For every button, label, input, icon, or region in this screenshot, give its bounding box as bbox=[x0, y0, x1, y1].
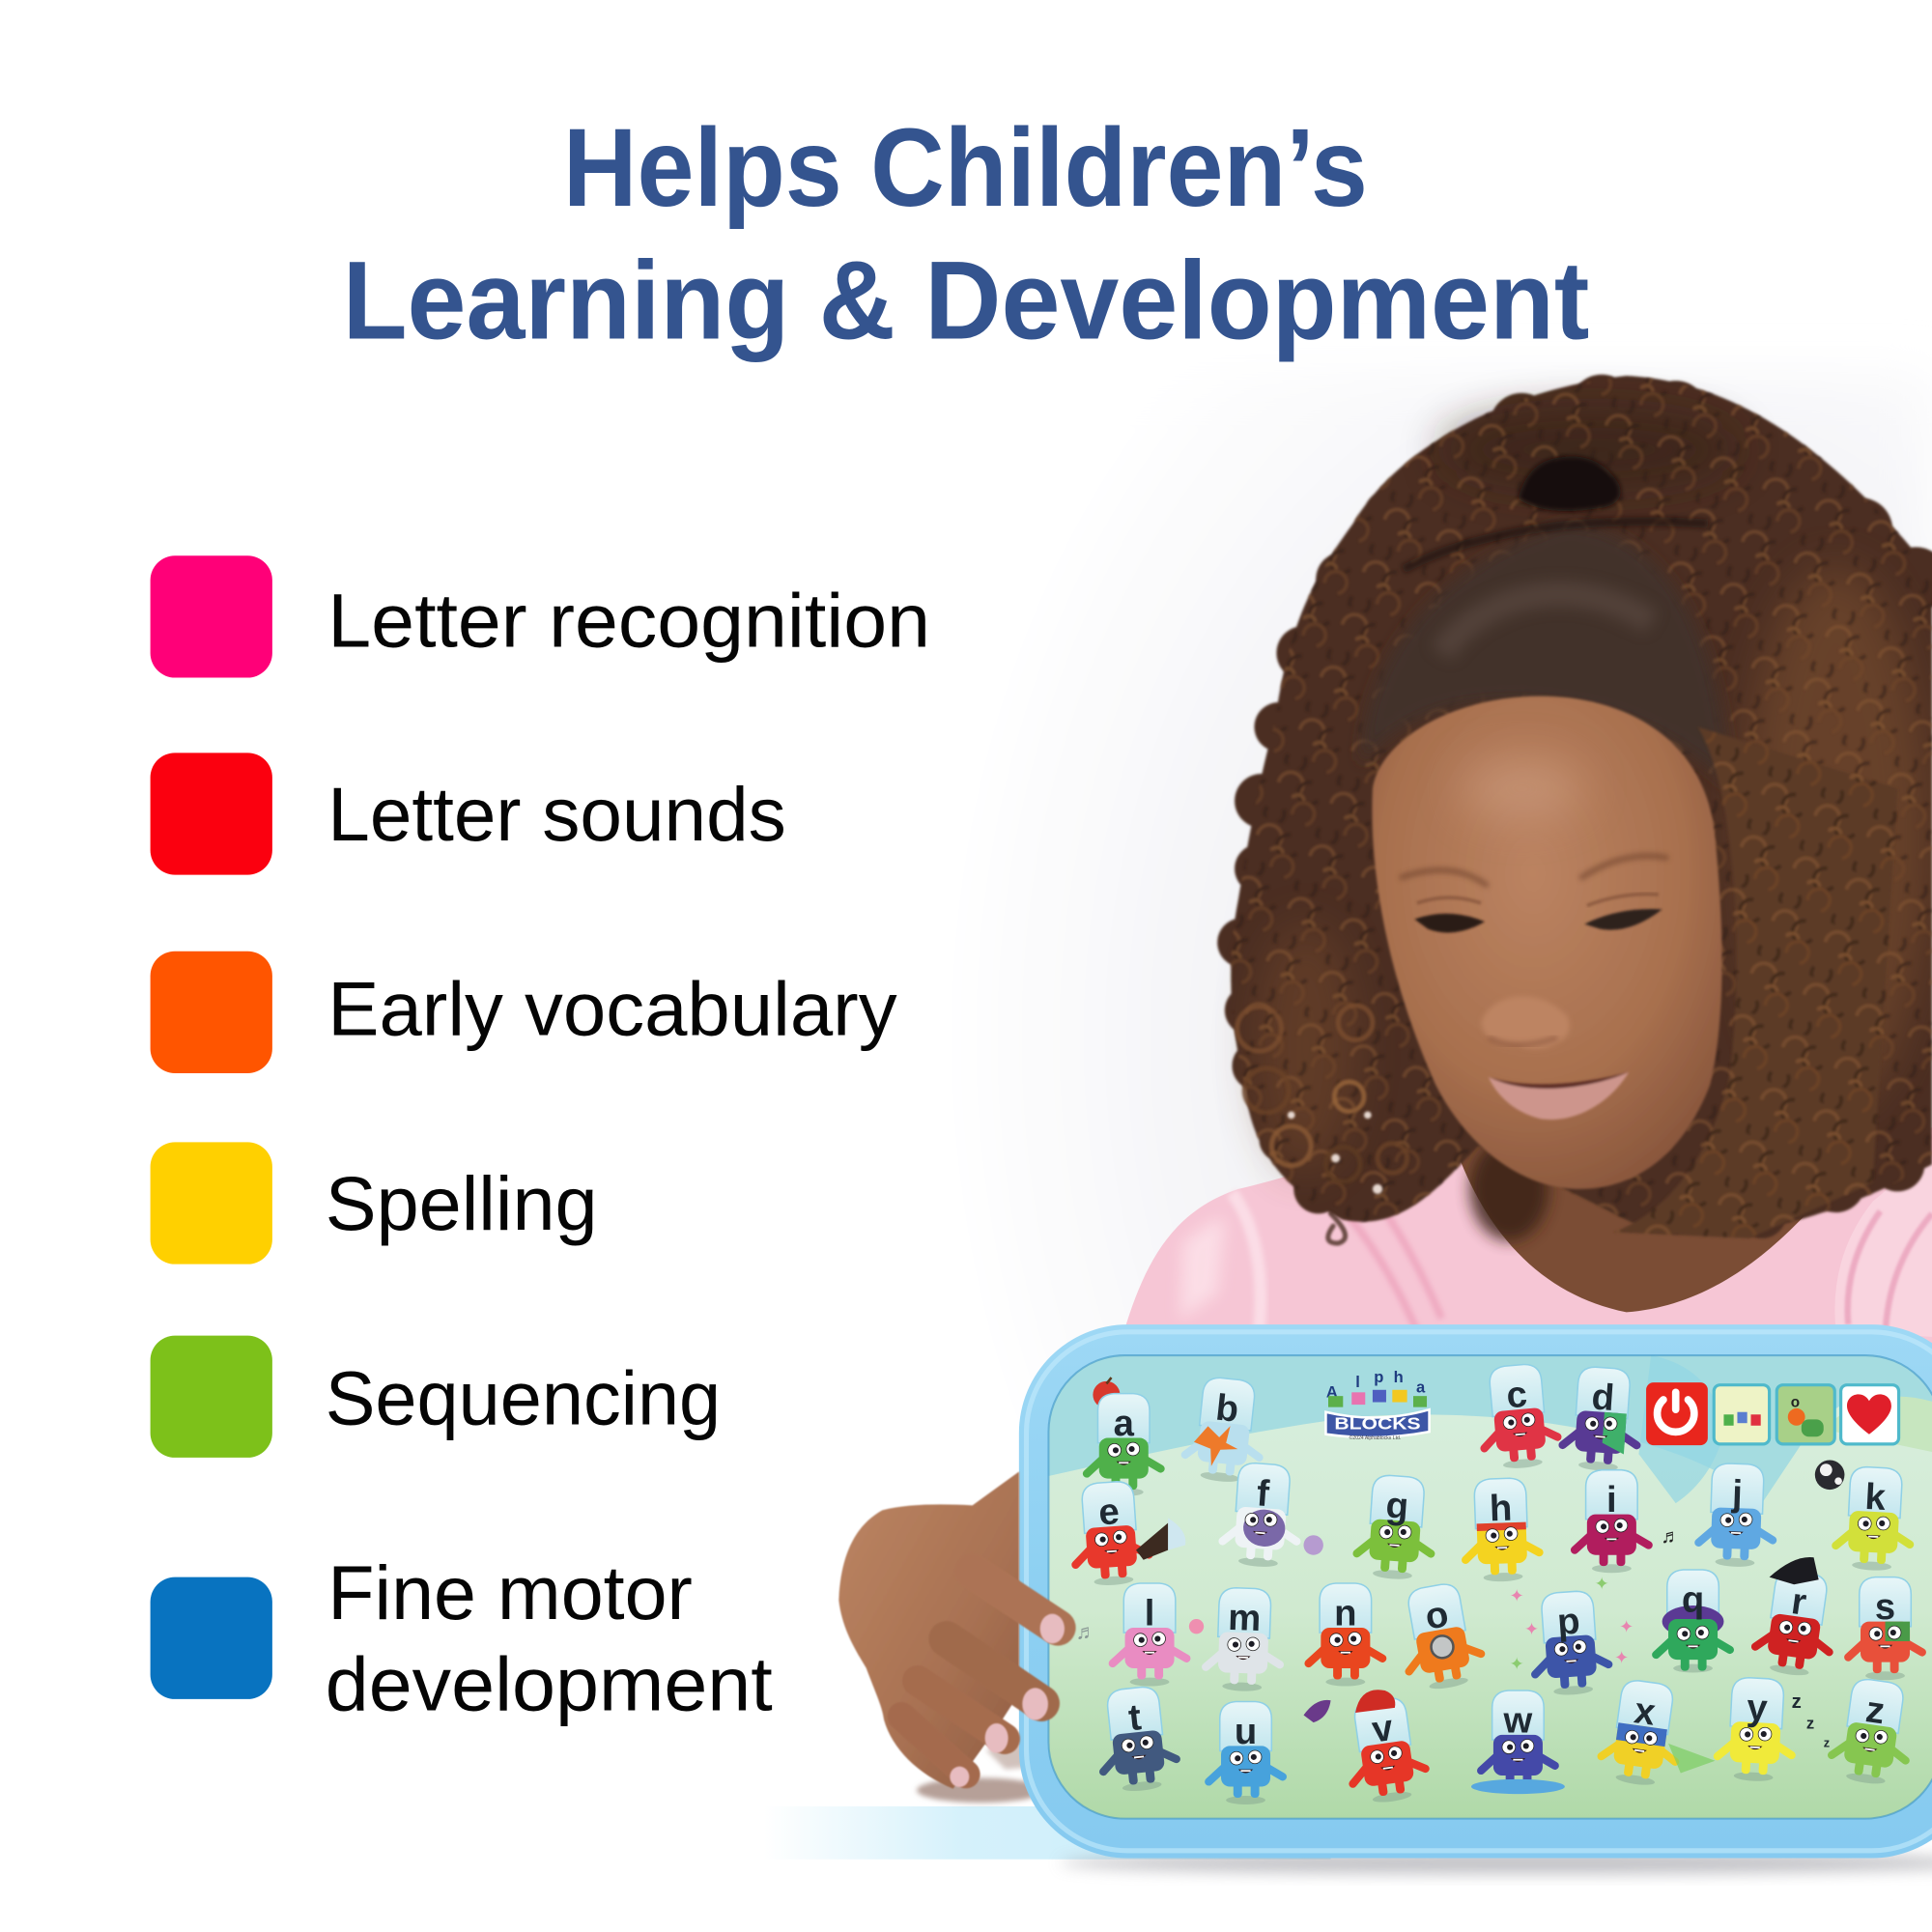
lower-left ringlets bbox=[1237, 1006, 1407, 1243]
tablet toy bbox=[1019, 1324, 1932, 1858]
accessory: football bbox=[1815, 1460, 1844, 1490]
title: Helps Children’s bbox=[563, 106, 1368, 230]
character f: f bbox=[1256, 1472, 1270, 1515]
character o: o bbox=[1422, 1593, 1452, 1638]
character a bbox=[1087, 1394, 1161, 1496]
hair back bbox=[1217, 375, 1932, 1243]
character i bbox=[1575, 1470, 1649, 1573]
title: Learning & Development bbox=[343, 240, 1589, 363]
accessory: x-ray beam bbox=[1668, 1744, 1716, 1773]
face bbox=[1372, 696, 1722, 1189]
curl texture bbox=[1231, 376, 1932, 1233]
character t bbox=[1094, 1685, 1179, 1795]
soft backdrop haze behind the girl bbox=[788, 372, 1932, 1851]
item: letter recognition: Letter recognition bbox=[327, 578, 930, 664]
palm bbox=[838, 1471, 1019, 1789]
button: power bbox=[1646, 1382, 1708, 1445]
tablet frame bbox=[1019, 1324, 1932, 1858]
sparkles around p: ✦ bbox=[1619, 1617, 1634, 1636]
character b bbox=[1182, 1375, 1267, 1485]
item: fine motor development: development bbox=[326, 1640, 773, 1726]
fingernails bbox=[950, 1614, 1065, 1787]
mouth bbox=[1489, 1072, 1629, 1120]
character p bbox=[1529, 1589, 1610, 1697]
logo: Alphablocks: BLOCKS bbox=[1334, 1414, 1421, 1434]
logo: Alphablocks: a bbox=[1416, 1378, 1426, 1396]
alphabet characters bbox=[1070, 1362, 1922, 1806]
sparkles around p: ✦ bbox=[1510, 1654, 1524, 1673]
control buttons bbox=[1646, 1382, 1899, 1445]
eyes bbox=[1414, 895, 1662, 932]
character c bbox=[1477, 1362, 1560, 1471]
character x: x bbox=[1632, 1690, 1658, 1734]
hand bbox=[838, 1471, 1065, 1789]
character d bbox=[1561, 1365, 1642, 1473]
shirt bbox=[1119, 1115, 1932, 1380]
forehead highlight bbox=[1460, 759, 1583, 818]
logo: Alphablocks bbox=[1325, 1368, 1430, 1441]
character q bbox=[1656, 1570, 1730, 1673]
item: letter sounds bbox=[151, 753, 786, 875]
right side curls over face edge bbox=[1614, 727, 1897, 1238]
character z bbox=[1829, 1676, 1916, 1788]
hair band and scrunchie bbox=[1404, 457, 1708, 569]
character p: p bbox=[1556, 1601, 1581, 1643]
sparkles around p: ✦ bbox=[1524, 1620, 1539, 1639]
sparkles around p: ✦ bbox=[1510, 1586, 1524, 1605]
character h: h bbox=[1489, 1488, 1513, 1529]
character k: k bbox=[1864, 1476, 1888, 1519]
accessory: sleeping z letters bbox=[1792, 1691, 1830, 1750]
item: early vocabulary bbox=[151, 952, 897, 1073]
character n: n bbox=[1334, 1592, 1357, 1634]
accessory: puff bbox=[1303, 1535, 1323, 1555]
button: heart bbox=[1841, 1385, 1899, 1444]
character g: g bbox=[1384, 1485, 1410, 1527]
accessory: sleeping z letters: z bbox=[1806, 1715, 1814, 1733]
character e bbox=[1070, 1480, 1151, 1587]
character f bbox=[1221, 1462, 1302, 1569]
accessory: umbrella bbox=[1303, 1700, 1331, 1722]
character l bbox=[1113, 1583, 1186, 1687]
accessory: pirate hat bbox=[1770, 1557, 1819, 1584]
table reflection band bbox=[764, 1806, 1331, 1860]
logo: Alphablocks: p bbox=[1374, 1368, 1383, 1386]
swept-back front hair bbox=[1361, 524, 1731, 788]
character s: s bbox=[1875, 1586, 1895, 1628]
character a: a bbox=[1114, 1403, 1135, 1444]
character j bbox=[1698, 1463, 1776, 1568]
shirt ruffle bbox=[1834, 1152, 1932, 1337]
character w: w bbox=[1503, 1699, 1533, 1741]
character b: b bbox=[1214, 1387, 1240, 1431]
accessory: puddle bbox=[1471, 1779, 1565, 1794]
character h bbox=[1463, 1477, 1540, 1582]
character y: y bbox=[1746, 1687, 1769, 1729]
character v bbox=[1342, 1694, 1430, 1806]
item: letter recognition bbox=[151, 555, 930, 678]
accessory: megaphone bbox=[1136, 1518, 1185, 1560]
item: sequencing: Sequencing bbox=[326, 1354, 721, 1440]
item: fine motor development bbox=[151, 1549, 773, 1726]
logo: Alphablocks: h bbox=[1394, 1368, 1404, 1386]
accessory: cupcake bbox=[1189, 1619, 1204, 1634]
character u bbox=[1208, 1701, 1283, 1804]
character r bbox=[1752, 1568, 1839, 1680]
neck bbox=[1452, 1060, 1838, 1312]
item: sequencing bbox=[151, 1336, 721, 1458]
character y bbox=[1717, 1676, 1796, 1783]
character i: i bbox=[1606, 1479, 1617, 1520]
item: letter sounds: Letter sounds bbox=[327, 771, 786, 857]
item: early vocabulary: Early vocabulary bbox=[327, 965, 897, 1051]
skills list bbox=[151, 555, 930, 1726]
character n bbox=[1309, 1583, 1382, 1687]
character r: r bbox=[1789, 1580, 1809, 1624]
accessory: helmet bbox=[1355, 1690, 1395, 1713]
eyebrows bbox=[1403, 856, 1665, 885]
character z: z bbox=[1863, 1689, 1888, 1732]
accessory: music staff: ♬ bbox=[1076, 1619, 1096, 1643]
character v: v bbox=[1370, 1707, 1396, 1751]
fingers bbox=[901, 1572, 1058, 1775]
logo: Alphablocks: ©2024 Alphablocks Ltd. bbox=[1350, 1435, 1401, 1441]
sparkles around p bbox=[1510, 1574, 1634, 1673]
shadow of the hand on the table bbox=[917, 1743, 1045, 1803]
character j: j bbox=[1730, 1472, 1744, 1515]
character x bbox=[1598, 1677, 1686, 1789]
button: letter o game: o bbox=[1791, 1395, 1800, 1411]
character q: q bbox=[1682, 1578, 1704, 1620]
girl bbox=[1119, 375, 1932, 1380]
gaps between ringlets bbox=[1288, 1112, 1382, 1194]
sparkles around p: ✦ bbox=[1595, 1574, 1609, 1593]
shadow under the tablet bbox=[1060, 1852, 1932, 1874]
sparkles around p: ✦ bbox=[1614, 1648, 1629, 1667]
character k bbox=[1834, 1465, 1914, 1573]
character d: d bbox=[1590, 1376, 1616, 1419]
character c: c bbox=[1505, 1374, 1529, 1416]
character t: t bbox=[1126, 1696, 1144, 1739]
button: letter o game bbox=[1776, 1385, 1834, 1444]
accessory: apple bbox=[1093, 1378, 1120, 1408]
character l: l bbox=[1145, 1592, 1154, 1634]
character m bbox=[1205, 1587, 1283, 1692]
accessory: sleeping z letters: z bbox=[1824, 1736, 1830, 1750]
character g bbox=[1355, 1473, 1436, 1581]
item: spelling: Spelling bbox=[326, 1160, 598, 1246]
nose bbox=[1481, 996, 1570, 1049]
accessory: music note: ♬ bbox=[1661, 1526, 1681, 1548]
character u: u bbox=[1235, 1711, 1257, 1752]
title bbox=[343, 106, 1589, 363]
character s bbox=[1848, 1577, 1922, 1680]
logo: Alphablocks: l bbox=[1355, 1373, 1360, 1391]
item: fine motor development: Fine motor bbox=[327, 1549, 693, 1635]
hair colour variation bbox=[1744, 567, 1928, 1109]
item: spelling bbox=[151, 1142, 598, 1264]
accessory: sleeping z letters: z bbox=[1792, 1691, 1802, 1713]
button: alphabet game bbox=[1714, 1385, 1770, 1444]
character e: e bbox=[1097, 1491, 1121, 1533]
tablet screen bbox=[1048, 1355, 1932, 1819]
character o bbox=[1395, 1579, 1486, 1694]
character m: m bbox=[1228, 1597, 1262, 1639]
logo: Alphablocks: A bbox=[1326, 1382, 1338, 1401]
character w bbox=[1481, 1690, 1555, 1794]
